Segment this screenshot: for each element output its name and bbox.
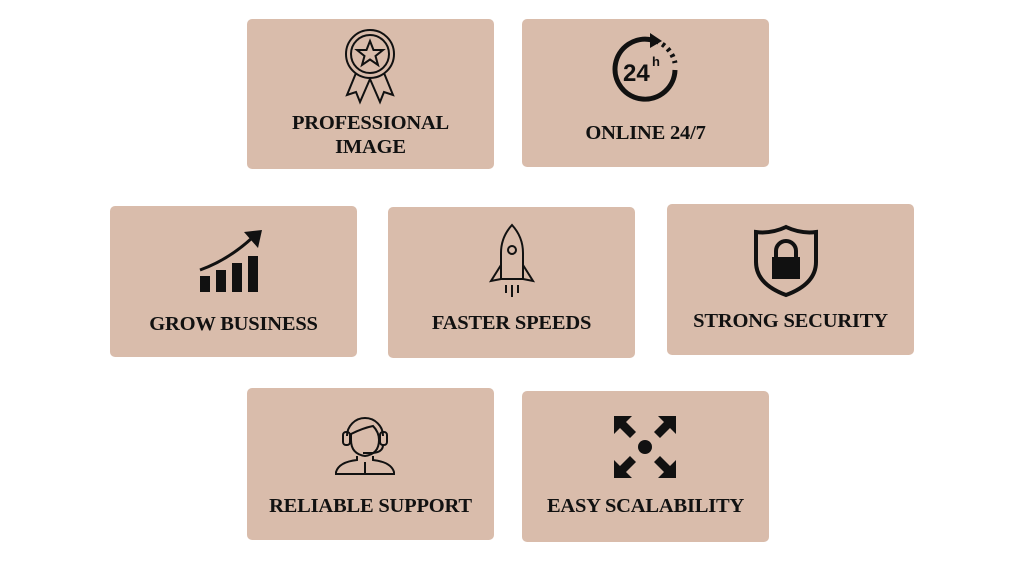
card: faster speeds xyxy=(388,207,635,358)
icon: award ribbon xyxy=(345,29,395,104)
label: EASY SCALABILITY xyxy=(547,495,744,517)
icon: 24h clock xyxy=(612,33,678,102)
label: PROFESSIONAL xyxy=(292,112,449,134)
label: ONLINE 24/7 xyxy=(585,122,706,144)
label xyxy=(292,112,449,158)
icon: 24h clock: h xyxy=(652,54,660,69)
card: professional image xyxy=(247,19,494,169)
card: grow business xyxy=(110,206,357,357)
icon: headset agent xyxy=(335,417,395,475)
label: STRONG SECURITY xyxy=(693,310,888,332)
icon: expand arrows xyxy=(614,416,676,478)
card: reliable support xyxy=(247,388,494,540)
icon: 24h clock: 24 xyxy=(623,60,650,87)
label: FASTER SPEEDS xyxy=(432,312,591,334)
card: easy scalability xyxy=(522,391,769,542)
label: RELIABLE SUPPORT xyxy=(269,495,472,517)
label: IMAGE xyxy=(335,136,406,158)
card: strong security xyxy=(667,204,914,355)
icon: growth chart xyxy=(200,230,262,292)
card: online 24/7 xyxy=(522,19,769,167)
label: GROW BUSINESS xyxy=(149,313,318,335)
icon: shield lock xyxy=(754,224,818,298)
icon: rocket xyxy=(489,224,535,297)
